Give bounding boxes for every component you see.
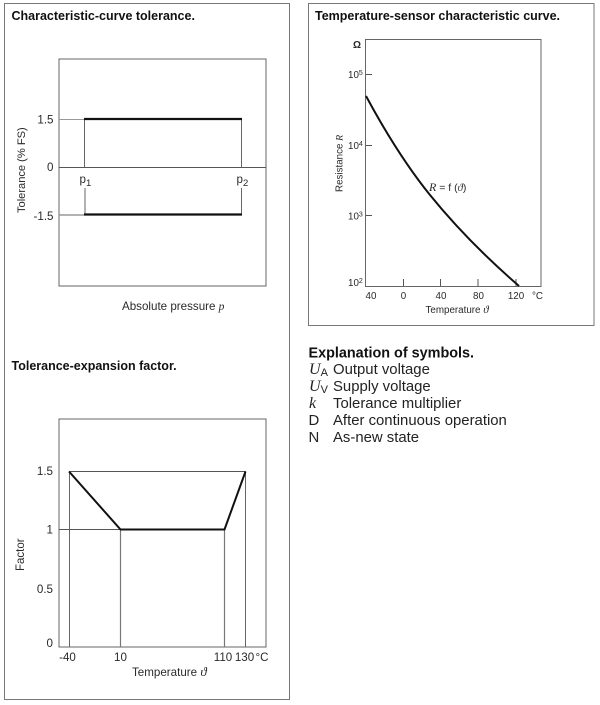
chart: characteristic-curve tolerance: Absolute pressure p	[122, 300, 225, 313]
chart: temperature-sensor characteristic curve: Temperature ϑ	[426, 304, 489, 316]
chart: temperature-sensor characteristic curve: R = f (ϑ)	[428, 180, 466, 194]
panel: left frame	[4, 4, 290, 700]
chart: temperature-sensor characteristic curve: 2	[359, 278, 363, 285]
chart: characteristic-curve tolerance: -1.5	[34, 210, 54, 223]
chart: temperature-sensor characteristic curve: 10	[348, 212, 359, 222]
legend: explanation of symbols: N	[308, 430, 319, 446]
heading: characteristic-curve tolerance: Characteristic-curve tolerance.	[12, 9, 195, 23]
chart: tolerance-expansion factor	[15, 419, 269, 679]
chart: temperature-sensor characteristic curve: 120	[508, 291, 525, 302]
legend: explanation of symbols: Tolerance multiplier	[333, 396, 461, 412]
resistance curve	[366, 96, 519, 286]
chart: characteristic-curve tolerance: 2	[243, 178, 248, 189]
lower tolerance line	[84, 213, 242, 216]
legend: explanation of symbols: Supply voltage	[333, 379, 431, 395]
legend: explanation of symbols	[308, 346, 507, 446]
chart: characteristic-curve tolerance: 1.5	[37, 114, 54, 126]
chart: characteristic-curve tolerance: 0	[47, 161, 54, 174]
legend: explanation of symbols: After continuous operation	[333, 413, 507, 429]
chart: temperature-sensor characteristic curve: 40	[366, 291, 377, 302]
chart: tolerance-expansion factor: 1.5	[37, 465, 53, 478]
chart: tolerance-expansion factor: -40	[59, 651, 76, 664]
legend: explanation of symbols: Explanation of symbols.	[308, 346, 474, 362]
chart: temperature-sensor characteristic curve: 80	[473, 291, 484, 302]
heading: temperature-sensor characteristic curve: Temperature-sensor characteristic curve.	[315, 9, 560, 23]
legend: explanation of symbols: U	[309, 361, 321, 378]
chart: tolerance-expansion factor: 110	[214, 651, 232, 664]
upper tolerance line	[84, 118, 242, 120]
chart: temperature-sensor characteristic curve: Resistance R	[334, 135, 346, 192]
chart: tolerance-expansion factor: Temperature ϑ	[132, 664, 207, 679]
chart: tolerance-expansion factor: 0	[47, 637, 53, 650]
chart: characteristic-curve tolerance: p	[236, 173, 243, 186]
legend: explanation of symbols: D	[308, 413, 320, 429]
chart: characteristic-curve tolerance: Tolerance (% FS)	[16, 127, 28, 213]
chart: temperature-sensor characteristic curve: 0	[401, 291, 407, 302]
chart: temperature-sensor characteristic curve: 10	[348, 278, 359, 289]
chart: temperature-sensor characteristic curve	[334, 40, 543, 316]
chart: temperature-sensor characteristic curve: 3	[359, 212, 363, 218]
chart: temperature-sensor characteristic curve: 40	[436, 291, 447, 302]
heading: tolerance-expansion factor: Tolerance-expansion factor.	[12, 359, 177, 373]
legend: explanation of symbols: A	[321, 367, 329, 379]
factor curve	[69, 472, 246, 530]
chart: tolerance-expansion factor: 1	[47, 524, 53, 536]
legend: explanation of symbols: U	[309, 378, 321, 395]
chart: temperature-sensor characteristic curve: 5	[359, 70, 363, 77]
legend: explanation of symbols: As-new state	[333, 430, 419, 446]
chart: tolerance-expansion factor: °C	[256, 651, 269, 664]
legend: explanation of symbols: Output voltage	[333, 362, 430, 378]
chart: characteristic-curve tolerance: 1	[86, 178, 91, 189]
chart: characteristic-curve tolerance: p	[80, 173, 86, 186]
legend: explanation of symbols: k	[309, 395, 317, 412]
chart: tolerance-expansion factor: 0.5	[37, 583, 53, 596]
chart: tolerance-expansion factor: 130	[235, 651, 254, 664]
legend: explanation of symbols: V	[321, 384, 329, 396]
chart: tolerance-expansion factor: Factor	[15, 538, 27, 571]
chart: temperature-sensor characteristic curve: °C	[532, 291, 543, 302]
chart: characteristic-curve tolerance	[16, 59, 266, 313]
chart: tolerance-expansion factor: 10	[114, 651, 127, 664]
chart: temperature-sensor characteristic curve: 10	[348, 70, 359, 81]
panel: right frame	[308, 4, 594, 326]
chart: temperature-sensor characteristic curve: 4	[359, 141, 363, 148]
chart: temperature-sensor characteristic curve: Ω	[353, 40, 361, 51]
chart: temperature-sensor characteristic curve: 10	[348, 141, 359, 152]
